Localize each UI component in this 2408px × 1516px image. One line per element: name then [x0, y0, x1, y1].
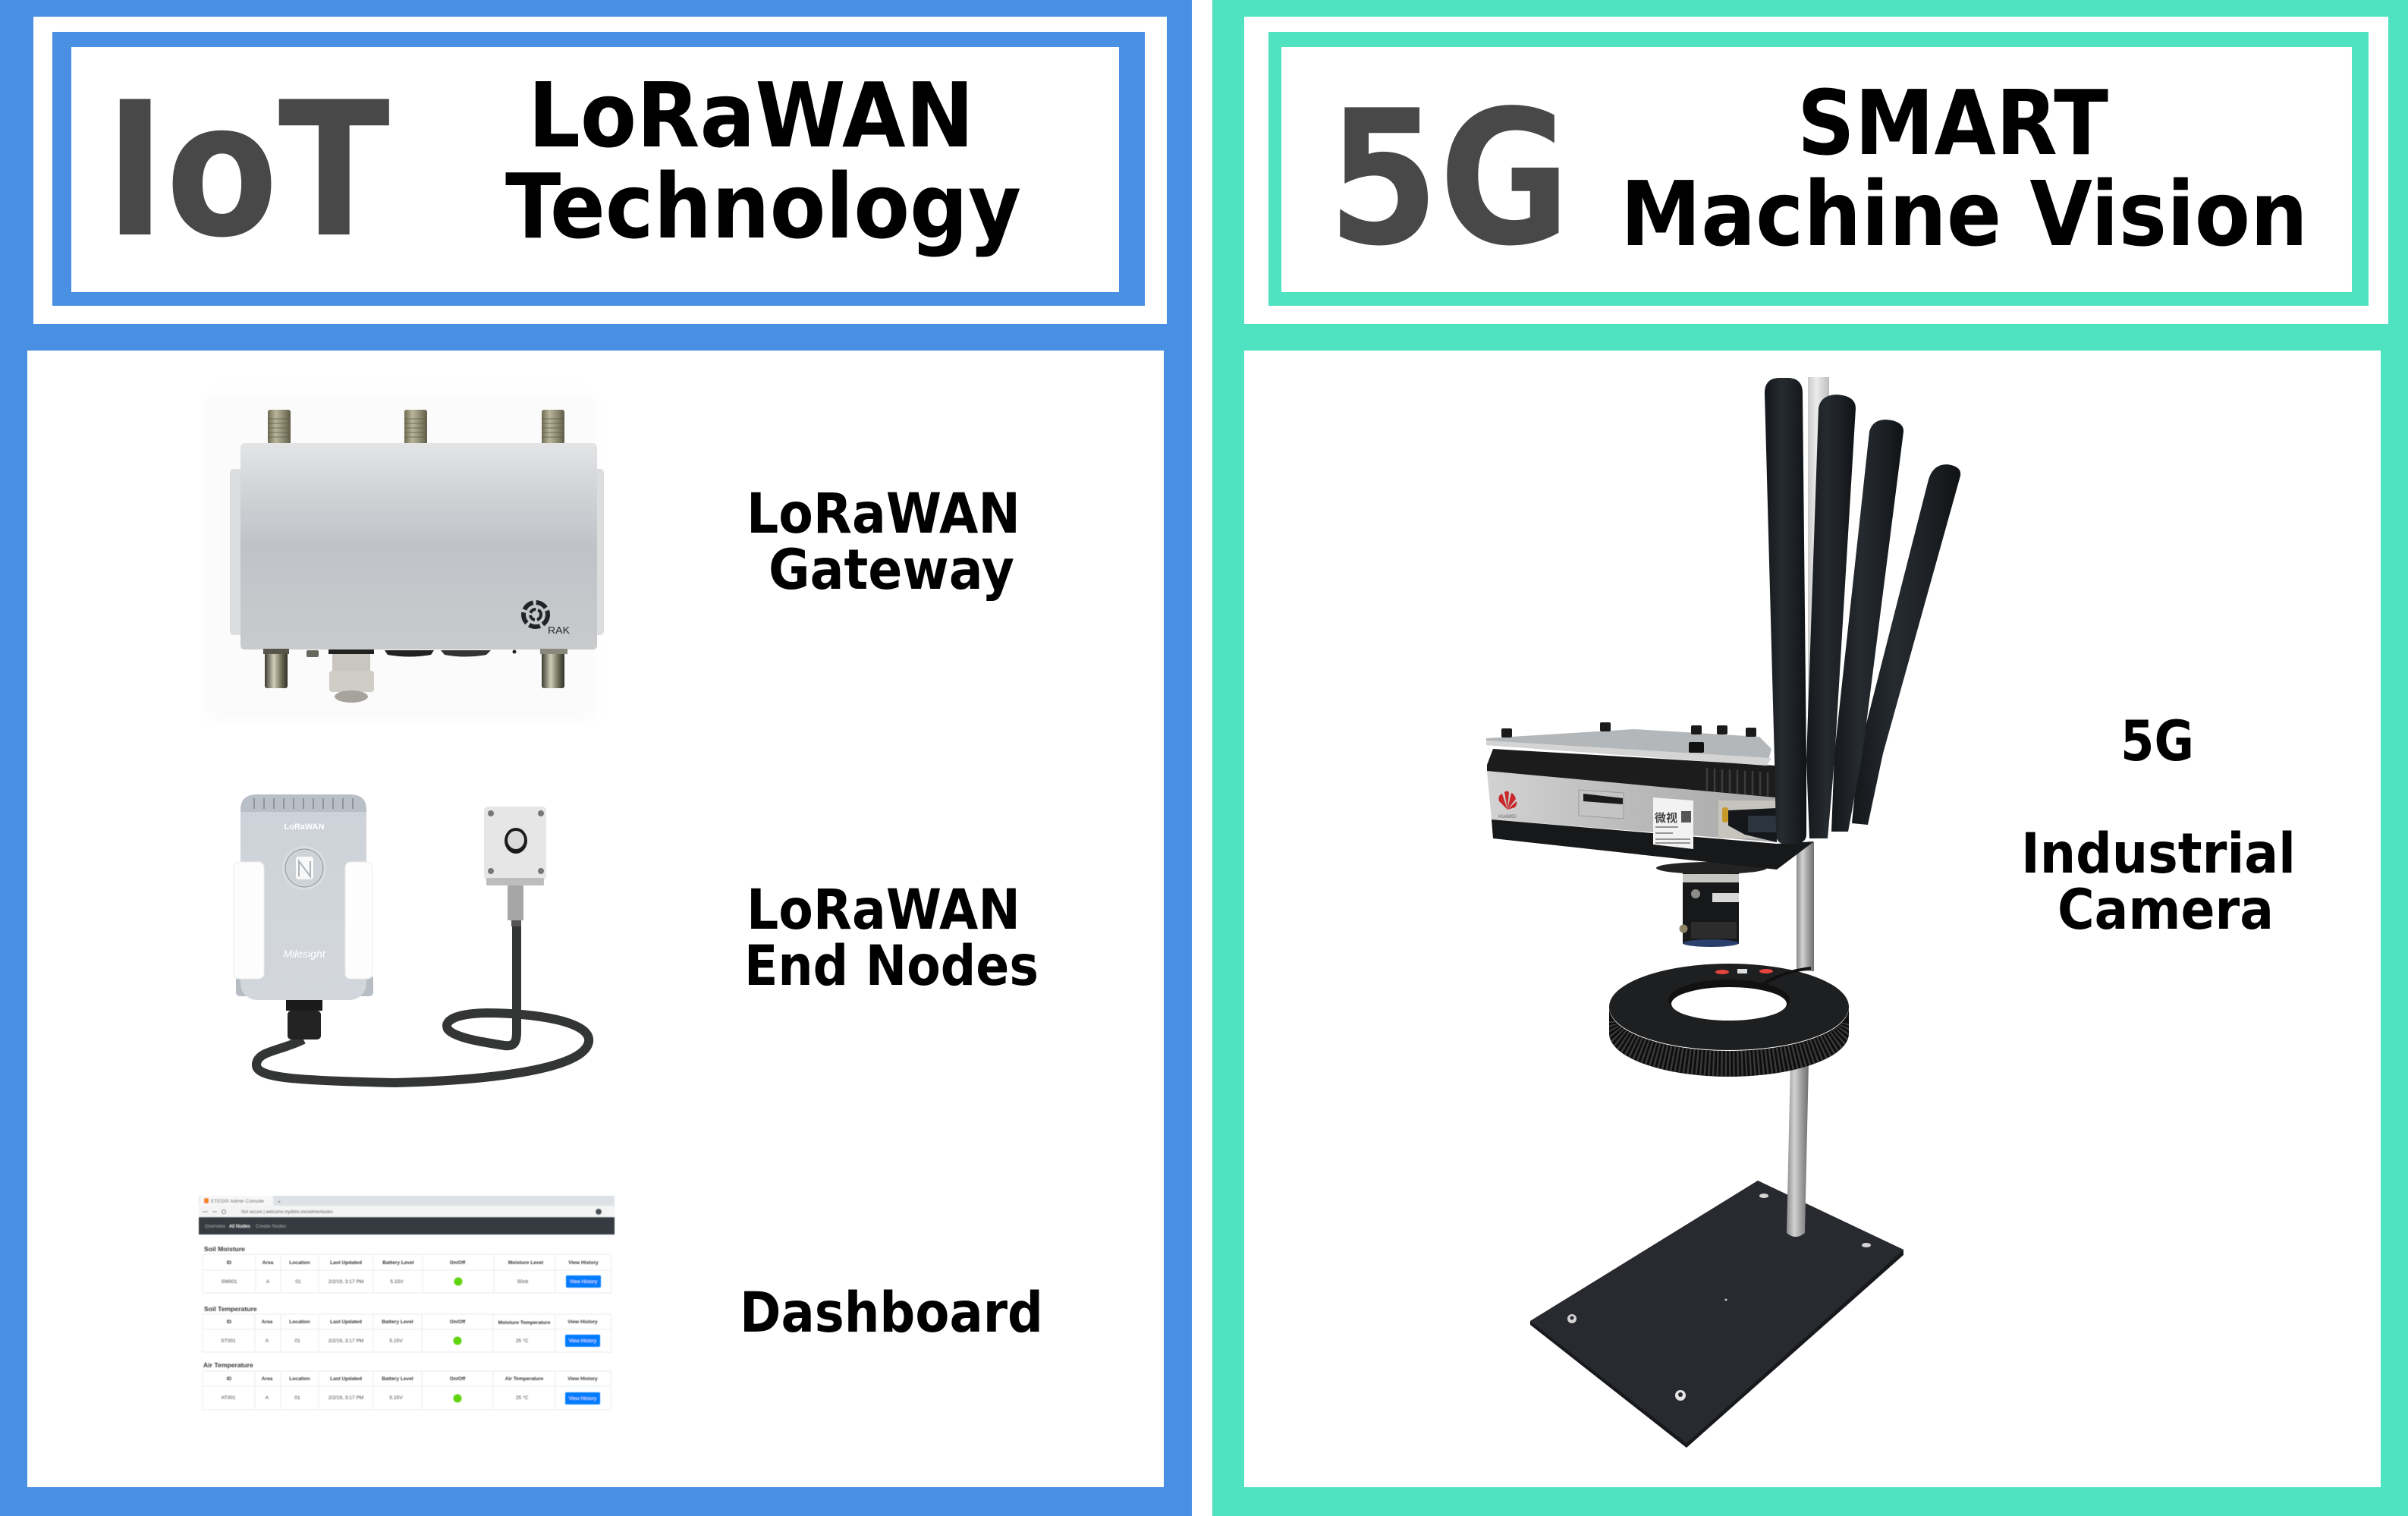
table: Soil Moisture: Last Updated	[330, 1260, 362, 1266]
image: LoRaWAN end node with sensor	[234, 794, 589, 1083]
table: Air Temperature: ID	[227, 1376, 232, 1382]
heading: SMART Machine Vision: SMART	[1797, 71, 2108, 175]
table: Air Temperature: 5.15V	[389, 1395, 403, 1401]
table: Soil Moisture: Soil Moisture	[204, 1245, 245, 1253]
icon: RAK logo: RAK	[548, 624, 570, 636]
header box: IoT	[33, 17, 1167, 324]
camera lens	[1656, 862, 1767, 947]
image: LoRaWAN end node with sensor: LoRaWAN	[284, 822, 325, 832]
table: Soil Temperature	[203, 1305, 611, 1352]
label: LoRaWAN End Nodes	[744, 878, 1039, 999]
label: LoRaWAN Gateway: LoRaWAN	[747, 482, 1020, 546]
table: Air Temperature: Area	[262, 1376, 273, 1382]
table: Soil Temperature: Area	[262, 1319, 273, 1325]
table: Soil Temperature: Battery Level	[382, 1319, 413, 1325]
table: Air Temperature: 25 °C	[516, 1395, 529, 1401]
image: dashboard screenshot: All Nodes	[229, 1224, 251, 1229]
label: LoRaWAN Gateway: Gateway	[769, 538, 1014, 602]
table: Air Temperature	[203, 1361, 611, 1410]
heading: 5G: 5G	[1328, 71, 1570, 287]
panel: IoT LoRaWAN	[0, 0, 1192, 1516]
base plate	[1530, 1181, 1903, 1448]
image: dashboard screenshot	[199, 1196, 615, 1410]
table: Soil Temperature: 25 °C	[516, 1338, 529, 1344]
image: 5G industrial camera on stand	[1486, 377, 1960, 1448]
table: Soil Temperature: Soil Temperature	[204, 1305, 257, 1313]
icon: Huawei logo	[1498, 791, 1517, 819]
heading: SMART Machine Vision: Machine Vision	[1621, 162, 2308, 266]
table: Soil Moisture: Battery Level	[382, 1260, 414, 1266]
table: Soil Moisture: View History	[568, 1260, 599, 1266]
sticker: 微视	[1655, 810, 1677, 826]
heading: LoRaWAN Technology	[505, 63, 1021, 259]
table: Soil Temperature: View History	[569, 1338, 597, 1344]
icon: NFC	[296, 857, 313, 879]
table: Air Temperature: 01	[294, 1395, 300, 1401]
image: dashboard screenshot: +	[278, 1200, 281, 1205]
heading: IoT: IoT	[105, 62, 390, 278]
panel: 5G Smart Machine Vision	[1212, 0, 2408, 1516]
table: Soil Moisture: A	[266, 1279, 270, 1285]
image: dashboard screenshot: Not secure | welcome.myddns.me/admin/nodes	[241, 1209, 334, 1215]
table: Soil Temperature: 5.15V	[389, 1338, 403, 1344]
table: Soil Temperature: 2/2/19, 3:17 PM	[329, 1338, 363, 1344]
table: Air Temperature: View History	[569, 1396, 597, 1401]
table: Soil Moisture: ID	[227, 1260, 232, 1266]
image: LoRaWAN gateway	[205, 395, 604, 721]
label: 5G Industrial Camera	[2021, 709, 2296, 942]
table: Soil Moisture: Location	[289, 1260, 310, 1266]
table: Soil Moisture: View History	[570, 1279, 598, 1285]
table: Air Temperature: 2/2/19, 3:17 PM	[329, 1395, 363, 1401]
stand pole	[1787, 377, 1829, 1237]
table: Soil Moisture: Moisture Level	[508, 1260, 543, 1266]
label: 5G Industrial Camera: Industrial	[2021, 822, 2296, 886]
label: 5G Industrial Camera: 5G	[2120, 709, 2194, 774]
image: dashboard screenshot: Create Nodes	[256, 1224, 287, 1229]
table: Soil Temperature: ST001	[221, 1338, 236, 1344]
table: Air Temperature: Air Temperature	[505, 1376, 544, 1382]
table: Soil Temperature: Last Updated	[330, 1319, 362, 1325]
table: Soil Moisture: 5.15V	[390, 1279, 404, 1285]
content area: IoT	[27, 351, 1164, 1487]
table: Soil Temperature: 01	[294, 1338, 300, 1344]
table: Soil Moisture: 01	[295, 1279, 301, 1285]
label: 5G Industrial Camera: Camera	[2057, 878, 2274, 942]
sticker	[1653, 797, 1693, 849]
antennas	[1765, 378, 1960, 844]
table: Air Temperature: Air Temperature	[203, 1361, 253, 1369]
table: Soil Moisture: On/Off	[450, 1260, 466, 1266]
header box: 5G	[1244, 17, 2388, 324]
table: Air Temperature: On/Off	[450, 1376, 466, 1382]
image: LoRaWAN end node with sensor: Milesight	[283, 948, 326, 960]
table: Air Temperature: AT001	[222, 1395, 236, 1401]
table: Air Temperature: Location	[289, 1376, 310, 1382]
table: Soil Moisture: 50cb	[517, 1279, 528, 1285]
table: Soil Temperature: View History	[567, 1319, 598, 1325]
table: Air Temperature: A	[266, 1395, 269, 1401]
camera body	[1486, 722, 1814, 870]
heading: LoRaWAN Technology: LoRaWAN	[528, 63, 974, 168]
image: dashboard screenshot: Overview	[205, 1224, 225, 1229]
ring light	[1609, 964, 1849, 1077]
table: Soil Temperature: Moisture Temperature	[498, 1320, 551, 1326]
image: dashboard screenshot: ETEDIX Admin Console	[211, 1199, 264, 1204]
table: Air Temperature: View History	[567, 1376, 598, 1382]
heading: SMART Machine Vision	[1621, 71, 2308, 266]
icon: Huawei logo: HUAWEI	[1498, 815, 1517, 819]
table: Soil Temperature: Location	[289, 1319, 310, 1325]
table: Soil Moisture	[203, 1245, 611, 1293]
label: LoRaWAN End Nodes: LoRaWAN	[747, 878, 1020, 942]
label: LoRaWAN Gateway	[747, 482, 1020, 602]
icon: RAK logo	[523, 602, 570, 636]
table: Air Temperature: Battery Level	[382, 1376, 413, 1382]
table: Soil Temperature: On/Off	[450, 1319, 466, 1325]
label: LoRaWAN End Nodes: End Nodes	[744, 934, 1039, 999]
table: Air Temperature: Last Updated	[330, 1376, 362, 1382]
table: Soil Moisture: 2/2/19, 3:17 PM	[329, 1279, 363, 1285]
content area: 5G	[1244, 351, 2381, 1487]
table: Soil Temperature: A	[266, 1338, 269, 1344]
table: Soil Moisture: SM001	[222, 1279, 237, 1285]
table: Soil Moisture: Area	[262, 1260, 274, 1266]
label: Dashboard: Dashboard	[740, 1281, 1043, 1345]
table: Soil Temperature: ID	[227, 1319, 232, 1325]
heading: LoRaWAN Technology: Technology	[505, 154, 1021, 259]
